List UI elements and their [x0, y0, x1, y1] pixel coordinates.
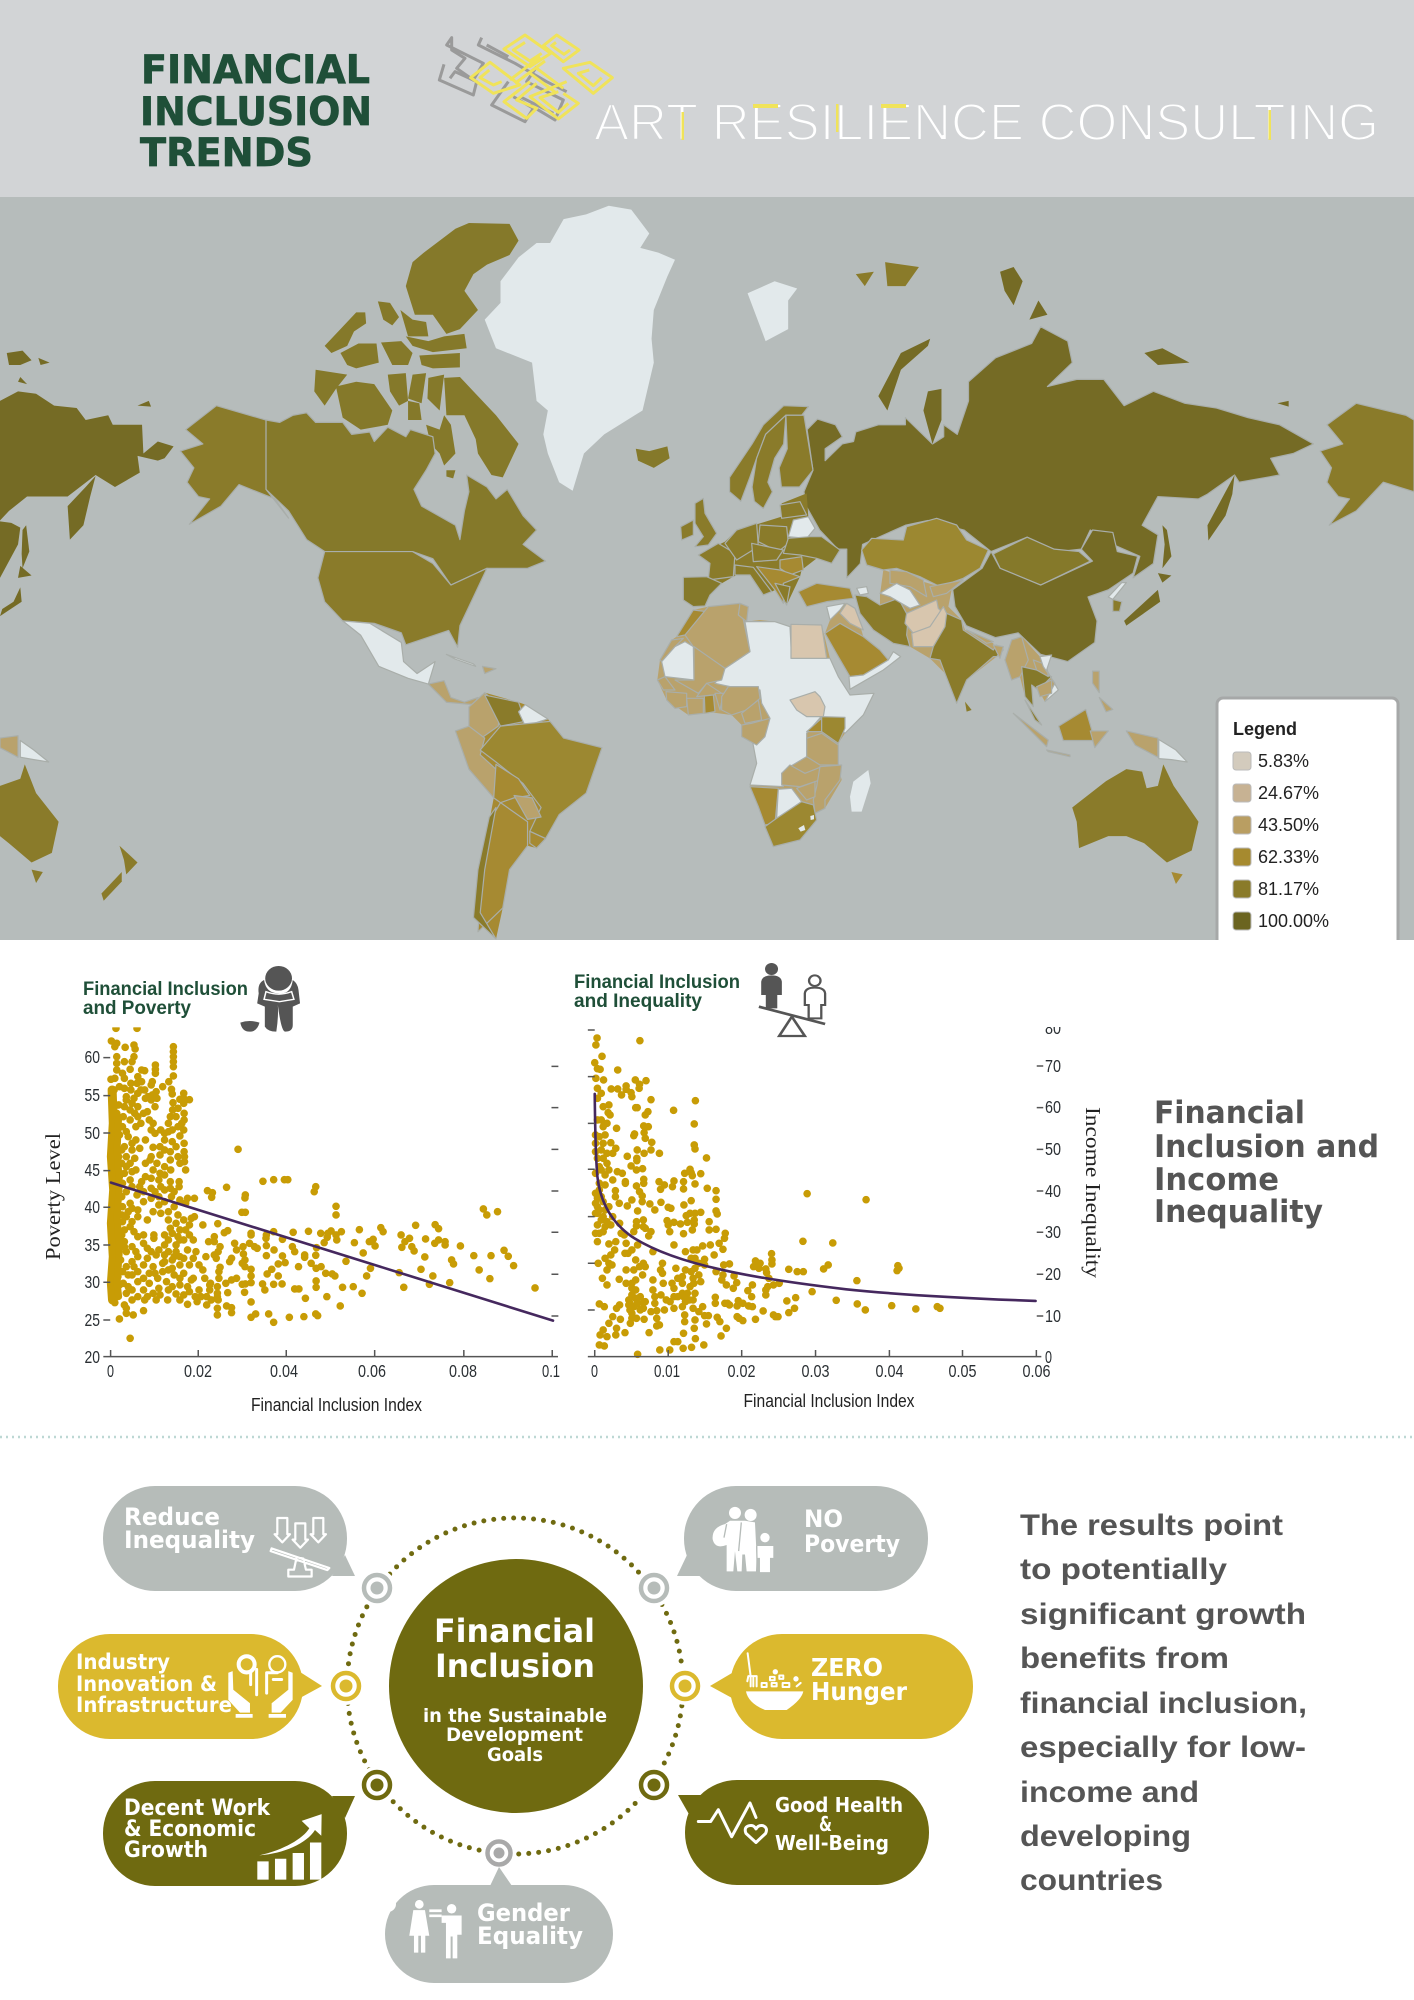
bubble: reduce inequality: Inequality [124, 1526, 255, 1554]
bubble: reduce inequality [103, 1486, 355, 1591]
bubble: decent work: Growth [124, 1838, 208, 1863]
icon: pulse and heart [698, 1803, 766, 1842]
central circle: Inclusion [435, 1647, 595, 1685]
chart: financial inclusion and inequality: Financial Inclusion Index [744, 1390, 915, 1411]
icon: bowl and fork [746, 1653, 803, 1710]
text block: results: significant growth [1020, 1598, 1306, 1631]
bubble: good health: & [819, 1812, 832, 1836]
axis labels: 50 [84, 1123, 100, 1143]
chart: financial inclusion and poverty: 0.02 [184, 1361, 212, 1381]
title: INCLUSION [140, 90, 372, 135]
chart: financial inclusion and inequality: 0 [591, 1361, 598, 1381]
dotted ring [347, 1518, 683, 1854]
axis labels: 30 [1045, 1222, 1061, 1242]
text block: results: The results point [1020, 1509, 1283, 1542]
Eurasia and Australia [730, 262, 1414, 884]
axis labels: 20 [84, 1347, 100, 1367]
icon: arrows and balance [271, 1518, 329, 1576]
icon: seated person with bowl [240, 966, 300, 1032]
axis labels [84, 1047, 100, 1367]
chart: financial inclusion and poverty: 0.06 [358, 1361, 386, 1381]
central circle: Development [446, 1724, 583, 1746]
bubble: gender equality: Gender [477, 1899, 570, 1927]
legend: 43.50% [1258, 815, 1319, 835]
chart heading: and Inequality [574, 991, 702, 1012]
bubble: decent work [103, 1781, 355, 1886]
text block: results: financial inclusion, [1020, 1687, 1307, 1720]
central circle [389, 1559, 643, 1813]
text block: results: developing [1020, 1820, 1191, 1853]
axis labels: 40 [84, 1197, 100, 1217]
icon: unequal balance [759, 963, 825, 1036]
SDG diagram [58, 1486, 973, 1983]
icon: hands gear and bulb [228, 1656, 293, 1718]
chart: financial inclusion and poverty: 0.1 [542, 1361, 560, 1381]
axis labels: 25 [84, 1310, 100, 1330]
axes [551, 1030, 1043, 1357]
bubble: good health: Well-Being [775, 1831, 889, 1855]
bubble: industry innovation infrastructure: Innovation & [76, 1672, 217, 1696]
scatter points [595, 1038, 1036, 1354]
bubble: gender equality: Equality [477, 1922, 583, 1950]
title [140, 48, 372, 176]
axis labels: 40 [1045, 1181, 1061, 1201]
chart heading [574, 972, 740, 1012]
bubble: zero hunger: Hunger [811, 1677, 908, 1706]
legend: Legend [1233, 719, 1297, 739]
chart: financial inclusion and inequality: 0.02 [728, 1361, 756, 1381]
bubble: decent work: Decent Work [124, 1796, 271, 1821]
bubble: zero hunger [710, 1634, 973, 1739]
chart: financial inclusion and inequality: 0.05 [948, 1361, 976, 1381]
text block: results: especially for low- [1020, 1731, 1306, 1764]
icon: woman and man [409, 1900, 462, 1958]
axis labels: 20 [1045, 1264, 1061, 1284]
heading: financial inclusion and income inequality: Financial [1154, 1095, 1305, 1131]
legend: 5.83% [1258, 751, 1309, 771]
axis labels: 55 [84, 1085, 100, 1105]
bubble: good health [678, 1780, 929, 1885]
trend line [111, 1183, 553, 1321]
chart: financial inclusion and inequality: 0.03 [802, 1361, 830, 1381]
node rings [327, 1569, 704, 1870]
legend: 81.17% [1258, 879, 1319, 899]
heading: financial inclusion and income inequality: Inclusion and [1154, 1129, 1379, 1165]
chart: financial inclusion and inequality: 0.01 [654, 1361, 680, 1381]
logo knot [439, 35, 612, 122]
chart heading [83, 979, 248, 1019]
chart: financial inclusion and poverty: Poverty Level [41, 1133, 65, 1260]
chart: financial inclusion and poverty: Financial Inclusion Index [251, 1394, 423, 1415]
bubble: no poverty: Poverty [804, 1530, 900, 1558]
axes [103, 1058, 558, 1357]
central circle: Goals [487, 1744, 543, 1766]
axis labels: 50 [1045, 1139, 1061, 1159]
scatter points [107, 1021, 553, 1338]
chart: financial inclusion and poverty: 0 [107, 1361, 114, 1381]
chart: financial inclusion and poverty [41, 966, 560, 1415]
axis labels: 60 [1045, 1097, 1061, 1117]
chart: financial inclusion and inequality: 0.04 [876, 1361, 904, 1381]
Americas and Pacific [0, 206, 675, 939]
legend: 24.67% [1258, 783, 1319, 803]
text block: results: income and [1020, 1776, 1199, 1809]
chart: financial inclusion and inequality: Income Inequality [1081, 1107, 1105, 1279]
axis labels: 30 [84, 1272, 100, 1292]
bubble: industry innovation infrastructure: Infrastructure [76, 1693, 232, 1717]
chart heading: Financial Inclusion [83, 979, 248, 1000]
wordmark: ART RESILIENCE CONSULTING [594, 94, 1379, 152]
icon: growth bars and arrow [257, 1814, 322, 1880]
text block: results: to potentially [1020, 1553, 1227, 1586]
heading: financial inclusion and income inequality: Inequality [1154, 1194, 1323, 1230]
chart: financial inclusion and inequality [551, 963, 1105, 1411]
axis labels: 60 [84, 1047, 100, 1067]
bubble: no poverty [677, 1486, 928, 1591]
world map panel [0, 197, 1414, 962]
text block: results: benefits from [1020, 1642, 1229, 1675]
bubble: no poverty: NO [804, 1505, 843, 1533]
plot top clip mask [107, 1021, 199, 1027]
legend [1200, 698, 1414, 962]
bubble: zero hunger: ZERO [811, 1653, 883, 1682]
header band [0, 0, 1414, 198]
central circle: in the Sustainable [423, 1705, 607, 1727]
bubble: industry innovation infrastructure [58, 1634, 322, 1739]
chart heading: and Poverty [83, 998, 191, 1019]
axis labels: 80 [1045, 1018, 1061, 1038]
text block: results: countries [1020, 1864, 1163, 1897]
bubble: decent work: & Economic [124, 1817, 256, 1842]
icon: family [713, 1507, 773, 1572]
axis labels: 45 [84, 1160, 100, 1180]
heading: financial inclusion and income inequality: Income [1154, 1162, 1279, 1198]
trend curve [595, 1094, 1036, 1301]
bubble: good health: Good Health [775, 1793, 903, 1817]
heading: financial inclusion and income inequality [1154, 1095, 1379, 1230]
Europe, Africa, Middle East, South Asia [657, 493, 1070, 847]
axis labels: 10 [1045, 1306, 1061, 1326]
bubble: gender equality [380, 1867, 613, 1983]
title: FINANCIAL [141, 48, 370, 93]
chart: financial inclusion and inequality: 0.06 [1022, 1361, 1050, 1381]
chart: financial inclusion and poverty: 0.04 [270, 1361, 298, 1381]
central circle: Financial [434, 1612, 595, 1650]
legend: 62.33% [1258, 847, 1319, 867]
bubble: reduce inequality: Reduce [124, 1503, 220, 1531]
axis labels: 35 [84, 1235, 100, 1255]
title: TRENDS [140, 131, 313, 176]
axis labels: 0 [1045, 1347, 1052, 1367]
legend: 100.00% [1258, 911, 1329, 931]
axis labels [1045, 1018, 1061, 1367]
axis labels: 70 [1045, 1056, 1061, 1076]
bubble: industry innovation infrastructure: Industry [76, 1650, 170, 1674]
chart: financial inclusion and poverty: 0.08 [449, 1361, 477, 1381]
chart heading: Financial Inclusion [574, 972, 740, 993]
text block: results [1020, 1509, 1307, 1897]
